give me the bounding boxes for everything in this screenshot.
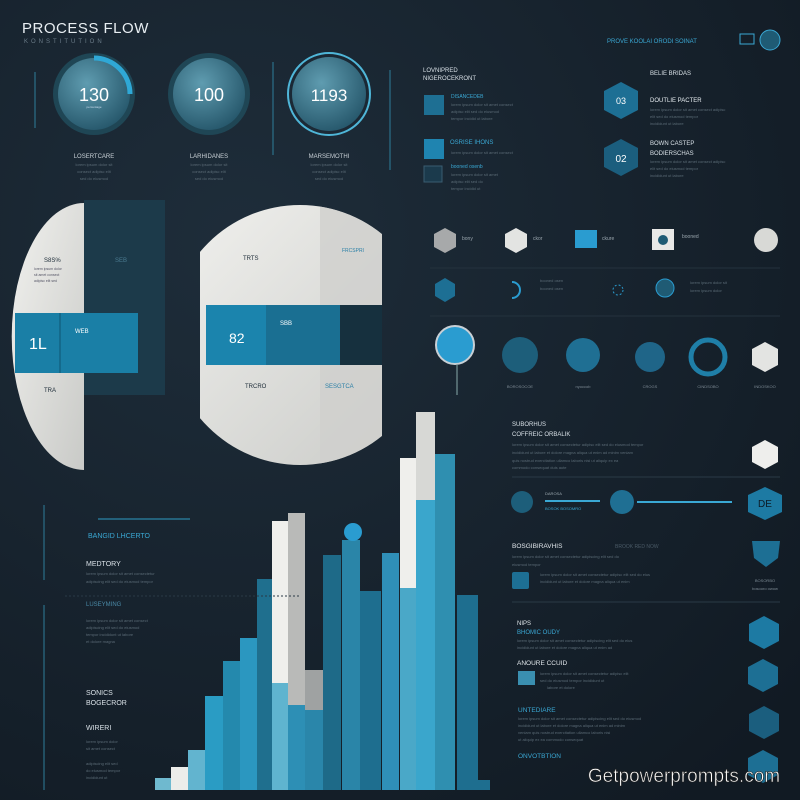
right pie panel: FRCSPRI — [342, 248, 364, 254]
left pie panel: S8S% — [44, 258, 61, 264]
top right header: PROVE KOOLAI ORODI SOINAT — [607, 39, 697, 45]
big icon row: CROGS — [643, 384, 658, 389]
left bottom text: BOGECROR — [86, 700, 127, 707]
gauge 3 — [288, 53, 370, 135]
right section: subomus: lorem ipsum dolor sit amet consectetur adipisc elit sed do eiusmod tempor — [512, 442, 644, 447]
left pie panel: WEB — [75, 329, 89, 335]
right section: subomus: COFFREIC ORBALIK — [512, 432, 570, 438]
section: hex steps: lorem ipsum dolor sit amet consect adipisc — [650, 107, 725, 112]
section: features list: lorem ipsum dolor sit amet — [451, 172, 499, 177]
section: hex steps — [604, 71, 725, 178]
gauge 2 — [168, 53, 250, 135]
gauge labels: LOSERTCARE — [74, 154, 114, 160]
left bottom text: LUSEYMING — [86, 602, 122, 608]
icon row 1: booned — [682, 234, 699, 240]
right section: subomus: commodo consequat duis aute — [512, 465, 567, 470]
section: hex steps: 03 — [616, 96, 626, 106]
left pie panel: TRA — [44, 388, 56, 394]
gauge labels: lorem ipsum dolor sit — [311, 162, 348, 167]
left bottom text: SONICS — [86, 690, 113, 697]
section: hex steps: BOWN CASTEP — [650, 141, 694, 147]
right section: list with hex icons: incididunt ut labore et dolore magna aliqua ut enim ad — [517, 645, 612, 650]
bar chart — [155, 412, 490, 790]
title: PROCESS FLOW — [22, 20, 149, 37]
right pie panel: SESGTCA — [325, 384, 354, 390]
section: hex steps: incididunt ut labore — [650, 173, 684, 178]
left bottom text — [44, 505, 300, 790]
gauge 1 — [53, 53, 135, 135]
gauge labels: sed do eiusmod — [80, 176, 108, 181]
right section: subomus: incididunt ut labore et dolore magna aliqua ut enim ad minim veniam — [512, 450, 634, 455]
left bottom text: lorem ipsum dolor sit amet consectetur — [86, 571, 155, 576]
big icon row — [436, 326, 778, 395]
section: features list: adipisc elit sed do — [451, 179, 484, 184]
section: features list: DISANCEDEB — [451, 94, 484, 100]
section: features list — [423, 68, 514, 191]
right section: bosgib: BOSGIBIRAVHIS — [512, 543, 563, 550]
right section: bosgib: lorem ipsum dolor sit amet consectetur adipisc elit sed do eius — [540, 572, 650, 577]
section: features list: LOVNIPRED — [423, 68, 458, 74]
gauge labels: lorem ipsum dolor sit — [76, 162, 113, 167]
section: hex steps: elit sed do eiusmod tempor — [650, 114, 699, 119]
section: hex steps: elit sed do eiusmod tempor — [650, 166, 699, 171]
gauge 2: 100 — [194, 85, 224, 105]
section: features list: lorem ipsum dolor sit amet consect — [451, 150, 514, 155]
right section: list with hex icons: lorem ipsum dolor sit amet consectetur adipiscing elit sed do eius — [517, 638, 632, 643]
right section: connector row: DAROSA — [545, 491, 562, 496]
right section: list with hex icons: ut aliquip ex ea commodo consequat — [518, 737, 584, 742]
right section: list with hex icons: ONVOTBTION — [518, 753, 561, 760]
section: features list: tempor incidid ut — [451, 186, 481, 191]
gauge labels: consect adipisc elit — [77, 169, 112, 174]
left bottom text: lorem ipsum dolor — [86, 739, 118, 744]
section: features list: tempor incidid ut labore — [451, 116, 493, 121]
section: hex steps: incididunt ut labore — [650, 121, 684, 126]
title: KONSTITUTION — [24, 39, 105, 45]
icon row 1: ckure — [602, 236, 614, 242]
right pie panel: TRTS — [243, 256, 259, 262]
gauge labels — [74, 154, 350, 181]
gauge labels: MARSEMOTHI — [309, 154, 350, 160]
section: hex steps: 02 — [615, 154, 627, 165]
big icon row: CINDSOBO — [697, 384, 719, 389]
right section: list with hex icons: UNTEDIARE — [518, 707, 556, 714]
right section: subomus — [512, 422, 780, 477]
right section: list with hex icons: BHOMIC OUDY — [517, 630, 560, 636]
watermark: Getpowerprompts.com — [588, 766, 780, 787]
right pie panel: TRCRO — [245, 384, 267, 390]
left bottom text: sit amet consect — [86, 746, 116, 751]
left bottom text: adipiscing elit sed do eiusmod tempor — [86, 579, 154, 584]
right section: connector row: BOSOK BOSOMRO — [545, 506, 581, 511]
left pie panel: adipisc elit sed — [34, 279, 57, 283]
left bottom text: adipiscing elit sed — [86, 761, 118, 766]
right section: bosgib: BROOK RED NOW — [615, 544, 659, 550]
left bottom text: WIRERI — [86, 725, 111, 732]
right section: list with hex icons: labore et dolore — [547, 685, 576, 690]
big icon row: BOROSOCOE — [507, 384, 533, 389]
gauge 1: percentage — [86, 105, 102, 109]
icon row 1: ckor — [533, 236, 543, 242]
right section: list with hex icons: incididunt ut labore et dolore magna aliqua ut enim ad minim — [518, 723, 626, 728]
right section: list with hex icons: lorem ipsum dolor sit amet consectetur adipiscing elit sed do eiusmod — [518, 716, 641, 721]
section: hex steps: BODIERSCHAS — [650, 151, 694, 157]
right section: list with hex icons: ANOURE CCUID — [517, 660, 568, 667]
gauge labels: LARHIDANES — [190, 154, 228, 160]
icon row 2: lorem ipsum dolor — [690, 288, 722, 293]
right section: list with hex icons: NIPS — [517, 621, 531, 627]
icon row 2: booned osen — [540, 286, 563, 291]
left bottom text: et dolore magna — [86, 639, 116, 644]
right section: bosgib — [512, 541, 780, 602]
right section: bosgib: eiusmod tempor — [512, 562, 541, 567]
title — [22, 20, 149, 45]
gauge 1: 130 — [79, 85, 109, 105]
section: features list: OSRISE IHONS — [450, 140, 493, 146]
big icon row: INDOSKOO — [754, 384, 776, 389]
left bottom text: do eiusmod tempor — [86, 768, 121, 773]
icon row 1 — [434, 228, 778, 253]
right pie panel: 82 — [229, 330, 245, 346]
left pie panel: SEB — [115, 258, 127, 264]
section: hex steps: BELIE BRIDAS — [650, 71, 691, 77]
right section: list with hex icons: sed do eiusmod tempor incididunt ut — [540, 678, 605, 683]
icon row 1: bony — [462, 236, 473, 242]
right section: bosgib: bosooro owow — [752, 586, 778, 591]
left bottom text: incididunt ut — [86, 775, 108, 780]
right pie panel — [200, 205, 382, 465]
left bottom text: adipiscing elit sed do eiusmod — [86, 625, 139, 630]
gauge 3: 1193 — [311, 86, 347, 105]
left pie panel: sit amet consect — [34, 273, 59, 277]
icon row 2: booned osen — [540, 278, 563, 283]
right pie panel: SBB — [280, 321, 292, 327]
gauge labels: sed do eiusmod — [195, 176, 223, 181]
icon row 2 — [430, 268, 780, 316]
section: hex steps: DOUTLIE PACTER — [650, 98, 702, 104]
section: hex steps: lorem ipsum dolor sit amet consect adipisc — [650, 159, 725, 164]
right section: bosgib: BOSORBO — [755, 578, 775, 583]
top right header — [607, 30, 780, 50]
big icon row: nyoccob — [576, 384, 591, 389]
section: features list: adipisc elit sed do eiusmod — [451, 109, 499, 114]
right section: list with hex icons: lorem ipsum dolor sit amet consectetur adipisc elit — [540, 671, 629, 676]
left pie panel: lorem ipsum dolor — [34, 267, 63, 271]
right section: list with hex icons — [517, 616, 779, 783]
section: features list: NIGEROCEKRONT — [423, 76, 476, 82]
right section: bosgib: incididunt ut labore et dolore magna aliqua ut enim — [540, 579, 630, 584]
right section: list with hex icons: veniam quis nostrud exercitation ullamco laboris nisi — [518, 730, 610, 735]
left bottom text: MEDTORY — [86, 561, 121, 568]
gauge labels: consect adipisc elit — [312, 169, 347, 174]
gauge labels: sed do eiusmod — [315, 176, 343, 181]
left pie panel — [12, 200, 165, 470]
section: features list: booned osenb — [451, 164, 483, 170]
right section: connector row: DE — [758, 499, 772, 510]
right section: connector row — [511, 487, 782, 520]
left pie panel: 1L — [29, 336, 47, 353]
icon row 2: lorem ipsum dolor sit — [690, 280, 728, 285]
right section: bosgib: lorem ipsum dolor sit amet consectetur adipiscing elit sed do — [512, 554, 620, 559]
left bottom text: BANGID LHCERTO — [88, 533, 151, 540]
gauge labels: lorem ipsum dolor sit — [191, 162, 228, 167]
section: features list: lorem ipsum dolor sit amet consect — [451, 102, 514, 107]
right section: subomus: quis nostrud exercitation ullamco laboris nisi ut aliquip ex ea — [512, 458, 619, 463]
left bottom text: tempor incididunt ut labore — [86, 632, 134, 637]
gauge labels: consect adipisc elit — [192, 169, 227, 174]
left bottom text: lorem ipsum dolor sit amet consect — [86, 618, 149, 623]
right section: subomus: SUBORHUS — [512, 422, 546, 428]
